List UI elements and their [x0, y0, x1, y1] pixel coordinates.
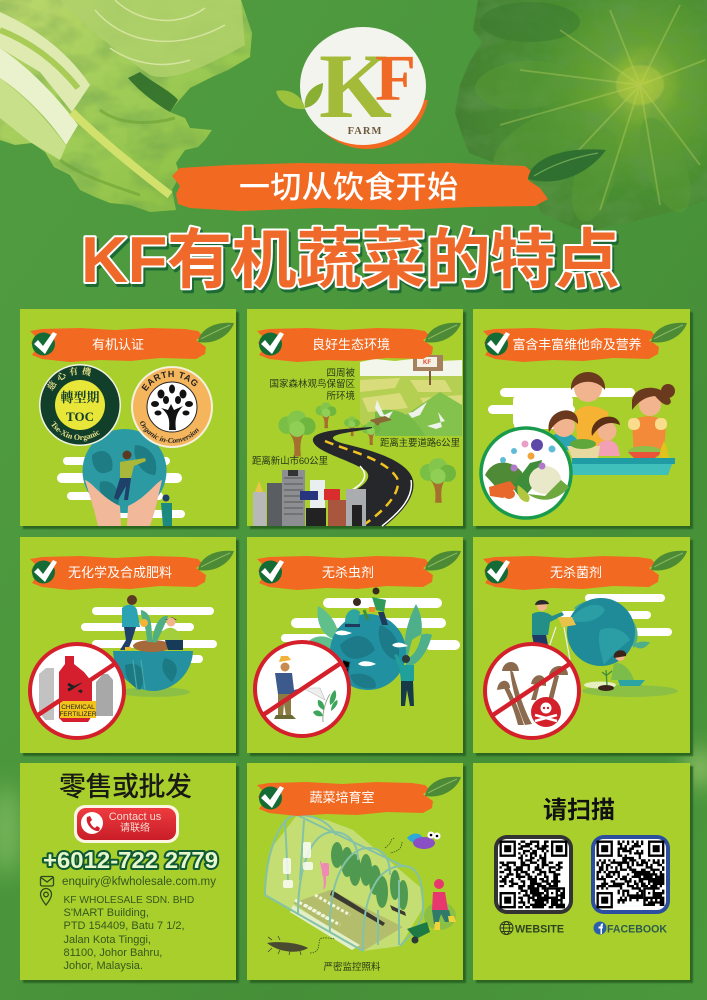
- sprayed plant: [303, 688, 338, 722]
- heading banner: [483, 323, 687, 362]
- prohibition sign: mushrooms: [485, 644, 579, 738]
- slash: [263, 663, 341, 715]
- prohibition sign: pesticide spraying: [255, 642, 349, 736]
- badge: Earth Tag: EARTH TAG: [142, 370, 198, 392]
- globe with hands: [82, 429, 172, 526]
- heading banner: [257, 323, 461, 362]
- phone number: +6012-722 2779: [43, 847, 218, 873]
- badge: TOC: 轉型期: [60, 390, 100, 405]
- landscape: [360, 355, 462, 436]
- badge: TOC: 慈心有機: [46, 366, 92, 391]
- red fertilizer bottle: [59, 656, 92, 722]
- farmers on half globe: [113, 595, 193, 697]
- road: [313, 427, 413, 526]
- facebook label: FACEBOOK: [607, 924, 667, 936]
- logo: KF letters: F: [375, 42, 416, 115]
- slash: [493, 663, 571, 715]
- centipede: [267, 936, 335, 955]
- badge: TOC: Tse-Xin Organic: [51, 421, 100, 442]
- people on globe: [305, 588, 432, 706]
- address: Johor, Malaysia.: [64, 960, 143, 972]
- greenhouse: [265, 815, 423, 951]
- contact button: 请联络: [120, 821, 150, 834]
- city distance note: 距离新山市60公里: [252, 455, 328, 467]
- location note: 四周被: [326, 367, 355, 379]
- panel: organic certification: [20, 309, 240, 530]
- location note: 国家森林观鸟保留区: [269, 378, 355, 390]
- farmer: [274, 656, 303, 719]
- heading: 无杀虫剂: [322, 565, 374, 580]
- heading banner: [30, 551, 234, 590]
- scan heading: 请扫描: [543, 797, 615, 824]
- cloud stripes: [488, 388, 635, 429]
- QR code: website: [494, 835, 573, 914]
- panel: no chemical fertilizer: [20, 537, 239, 756]
- slogan banner: [172, 149, 606, 211]
- grey bottles: [39, 668, 113, 720]
- road distance note: 距离主要道路6公里: [380, 437, 460, 449]
- arches: [265, 815, 423, 951]
- cloud stripes: [57, 457, 185, 518]
- logo: KF letters: K: [319, 35, 392, 137]
- address: Jalan Kota Tinggi,: [64, 934, 151, 946]
- heading: 蔬菜培育室: [309, 790, 375, 805]
- heading: 有机认证: [92, 337, 144, 352]
- website label: WEBSITE: [515, 924, 564, 936]
- prohibition sign: fertilizer: [30, 644, 124, 738]
- caption: 严密监控照料: [323, 961, 381, 973]
- heading: 无杀菌剂: [550, 565, 602, 580]
- globe with gardeners: [532, 598, 678, 697]
- heading: 良好生态环境: [312, 337, 390, 352]
- badge: Earth Tag: [131, 366, 213, 448]
- address: KF WHOLESALE SDN. BHD: [64, 895, 194, 906]
- panel: vitamins and nutrition: [473, 309, 693, 529]
- logo: [276, 27, 429, 149]
- city: [253, 470, 366, 526]
- panel: vegetable nursery: [247, 763, 466, 983]
- cloud stripes: [281, 598, 460, 650]
- poison skull: [531, 697, 561, 727]
- heading banner: [257, 551, 461, 590]
- photo: left lettuce: [0, 0, 252, 212]
- address: 81100, Johor Bahru,: [64, 947, 162, 959]
- logo: leaves: [276, 83, 323, 109]
- cloud stripes: [560, 594, 672, 636]
- plants: [331, 842, 408, 910]
- location note: 所环境: [326, 390, 355, 402]
- farmer: [407, 879, 456, 944]
- slogan text: 一切从饮食开始: [239, 170, 458, 205]
- table: [572, 458, 675, 464]
- panel: retail or wholesale contact: [20, 763, 239, 983]
- panel: scan QR codes: [473, 763, 693, 983]
- panel: no fungicide: [473, 537, 693, 756]
- contact button: [74, 805, 179, 843]
- heading banner: [257, 777, 461, 816]
- fly: [385, 832, 440, 853]
- photo: right lettuce: [455, 0, 707, 232]
- heading banner: [483, 551, 687, 590]
- email: enquiry@kfwholesale.com.my: [62, 876, 216, 888]
- icon: website globe: [500, 922, 513, 934]
- sign board: KF: [423, 360, 431, 366]
- heading: 无化学及合成肥料: [68, 565, 172, 580]
- birds: [375, 400, 445, 429]
- banner leaf: [528, 149, 606, 182]
- contact heading: 零售或批发: [59, 772, 192, 802]
- heading: 富含丰富维他命及营养: [512, 337, 642, 352]
- fertilizer label: CHEMICAL: [61, 704, 95, 711]
- cloud stripes: [81, 607, 217, 663]
- badge: TOC: TOC: [66, 409, 94, 424]
- badge: Earth Tag: Organic in-Conversion: [140, 421, 200, 443]
- icon: mail: [40, 876, 54, 886]
- fertilizer label: [59, 701, 97, 718]
- title: KF有机蔬菜的特点: [81, 223, 620, 296]
- icon: facebook: [594, 922, 606, 934]
- contact button: Contact us: [109, 811, 162, 823]
- heading banner: [30, 323, 234, 362]
- address: S'MART Building,: [64, 907, 149, 919]
- vegetable circle: [481, 428, 571, 518]
- slash: [38, 663, 116, 715]
- family illustration: [549, 372, 675, 475]
- logo: farm word: FARM: [348, 126, 382, 137]
- address: PTD 154409, Batu 7 1/2,: [64, 920, 185, 932]
- QR code: facebook: [591, 835, 670, 914]
- fertilizer label: FERTILIZER: [59, 711, 97, 718]
- panel: no pesticide: [247, 537, 466, 756]
- badge: TOC: [39, 364, 121, 446]
- icon: location pin: [40, 888, 52, 905]
- logo: orange crescent: [324, 100, 428, 149]
- logo: egg badge: [300, 27, 426, 145]
- trees: [278, 402, 456, 503]
- panel: good ecological environment: [247, 309, 466, 529]
